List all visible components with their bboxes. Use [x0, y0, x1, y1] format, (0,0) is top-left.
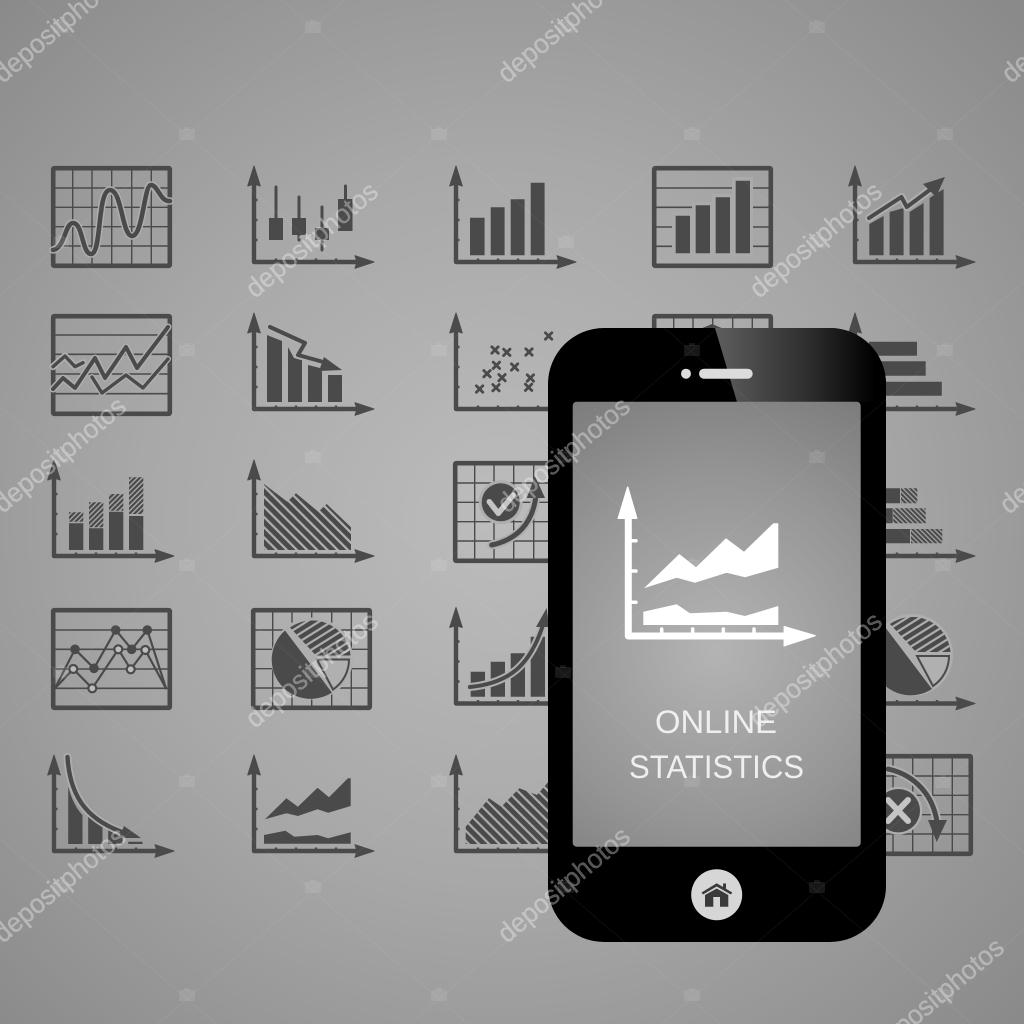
icon: candlestick chart [248, 166, 374, 268]
icon: pie chart on axes [849, 608, 975, 710]
icon: hatched area chart [450, 755, 576, 857]
icon: scatter plot [450, 313, 576, 415]
camera dot [681, 369, 691, 379]
icon: grid frame behind phone [654, 316, 771, 414]
speaker [699, 369, 753, 379]
icon: cross mark with downward arrow in grid [854, 756, 971, 854]
screen [573, 402, 861, 847]
icon: pie chart in grid [253, 610, 370, 708]
watermark overlay: depositphotos [744, 606, 888, 734]
icon: bar chart in frame [654, 168, 771, 266]
icon: growth bars with arrow [849, 166, 975, 268]
phone body [548, 328, 886, 942]
watermark overlay: depositphotos [492, 391, 636, 519]
icon: hatched falling area [248, 460, 374, 562]
watermark overlay: depositphotos [240, 176, 384, 304]
icon: line wave chart in grid [53, 168, 170, 266]
icon: decay curve bars [48, 755, 174, 857]
icon: horizontal bars [849, 313, 975, 415]
icon: home [702, 883, 732, 907]
watermark overlay: depositphotos [492, 821, 636, 949]
icon: growth curve bars [450, 608, 576, 710]
screen reflection [715, 328, 886, 402]
icon: falling bars with arrow [248, 313, 374, 415]
home button [691, 869, 742, 920]
icon: check mark with arrow in grid [455, 463, 572, 561]
icon: zigzag lines in frame [53, 316, 170, 414]
watermark overlay: depositphotos [240, 606, 384, 734]
screen title: ONLINE [655, 704, 777, 740]
watermark overlay: depositphotos [744, 176, 888, 304]
icon: white area chart [618, 487, 815, 646]
icon: bar chart [450, 166, 576, 268]
icon: two area chart [248, 755, 374, 857]
smartphone [548, 328, 886, 942]
icon: stacked horizontal bars with hatching [849, 460, 975, 562]
screen title [629, 704, 804, 785]
screen title: STATISTICS [629, 749, 804, 785]
icon: stacked bars with hatching [48, 460, 174, 562]
icon: line chart with markers [53, 610, 170, 708]
